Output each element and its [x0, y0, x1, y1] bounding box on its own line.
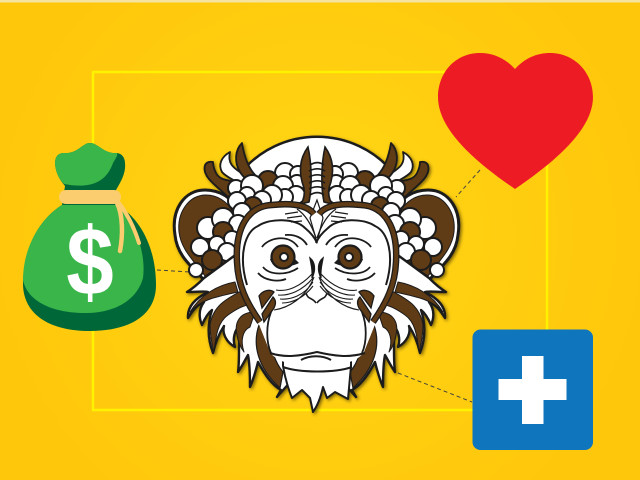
brow band: [237, 204, 314, 322]
beard: [283, 352, 351, 412]
inner face arc: [243, 220, 317, 285]
forehead stripes: [309, 163, 325, 195]
nose crease: [310, 258, 314, 278]
left curls: [189, 163, 306, 277]
monkey left half: [174, 143, 311, 397]
eye: [270, 246, 299, 268]
left ear: [174, 190, 242, 281]
left hair: [187, 256, 292, 397]
icon: heart: [438, 53, 593, 189]
face right half (mirror): [316, 204, 396, 353]
forehead wrinkles: [285, 209, 316, 238]
face: [237, 204, 396, 367]
braid: [259, 290, 275, 322]
icon: money bag: [23, 143, 156, 331]
dashed connector: heart to monkey: [456, 170, 480, 197]
tie rope: [66, 197, 139, 251]
nostril: [306, 293, 316, 303]
bag body shadow: [23, 143, 156, 331]
centre horn: [301, 147, 311, 204]
centre spike: [310, 200, 323, 242]
left flames: [204, 143, 256, 197]
icon: monkey head: [174, 137, 459, 412]
bag body highlight: [23, 205, 144, 313]
monkey dome: [243, 137, 391, 235]
bag knot highlight: [55, 143, 117, 186]
muzzle side: [267, 312, 271, 353]
monkey right half (mirror): [322, 143, 459, 397]
dollar sign: $: [66, 208, 114, 316]
dashed connector: medical cross to monkey: [398, 373, 472, 402]
icon: medical cross: [472, 330, 593, 450]
mouth: [270, 352, 365, 372]
eye creases: [258, 235, 307, 281]
cheek folds: [274, 274, 314, 310]
yellow connecting frame: [93, 72, 547, 410]
dashed connector: money bag to monkey: [157, 270, 190, 272]
face left half: [237, 204, 317, 353]
